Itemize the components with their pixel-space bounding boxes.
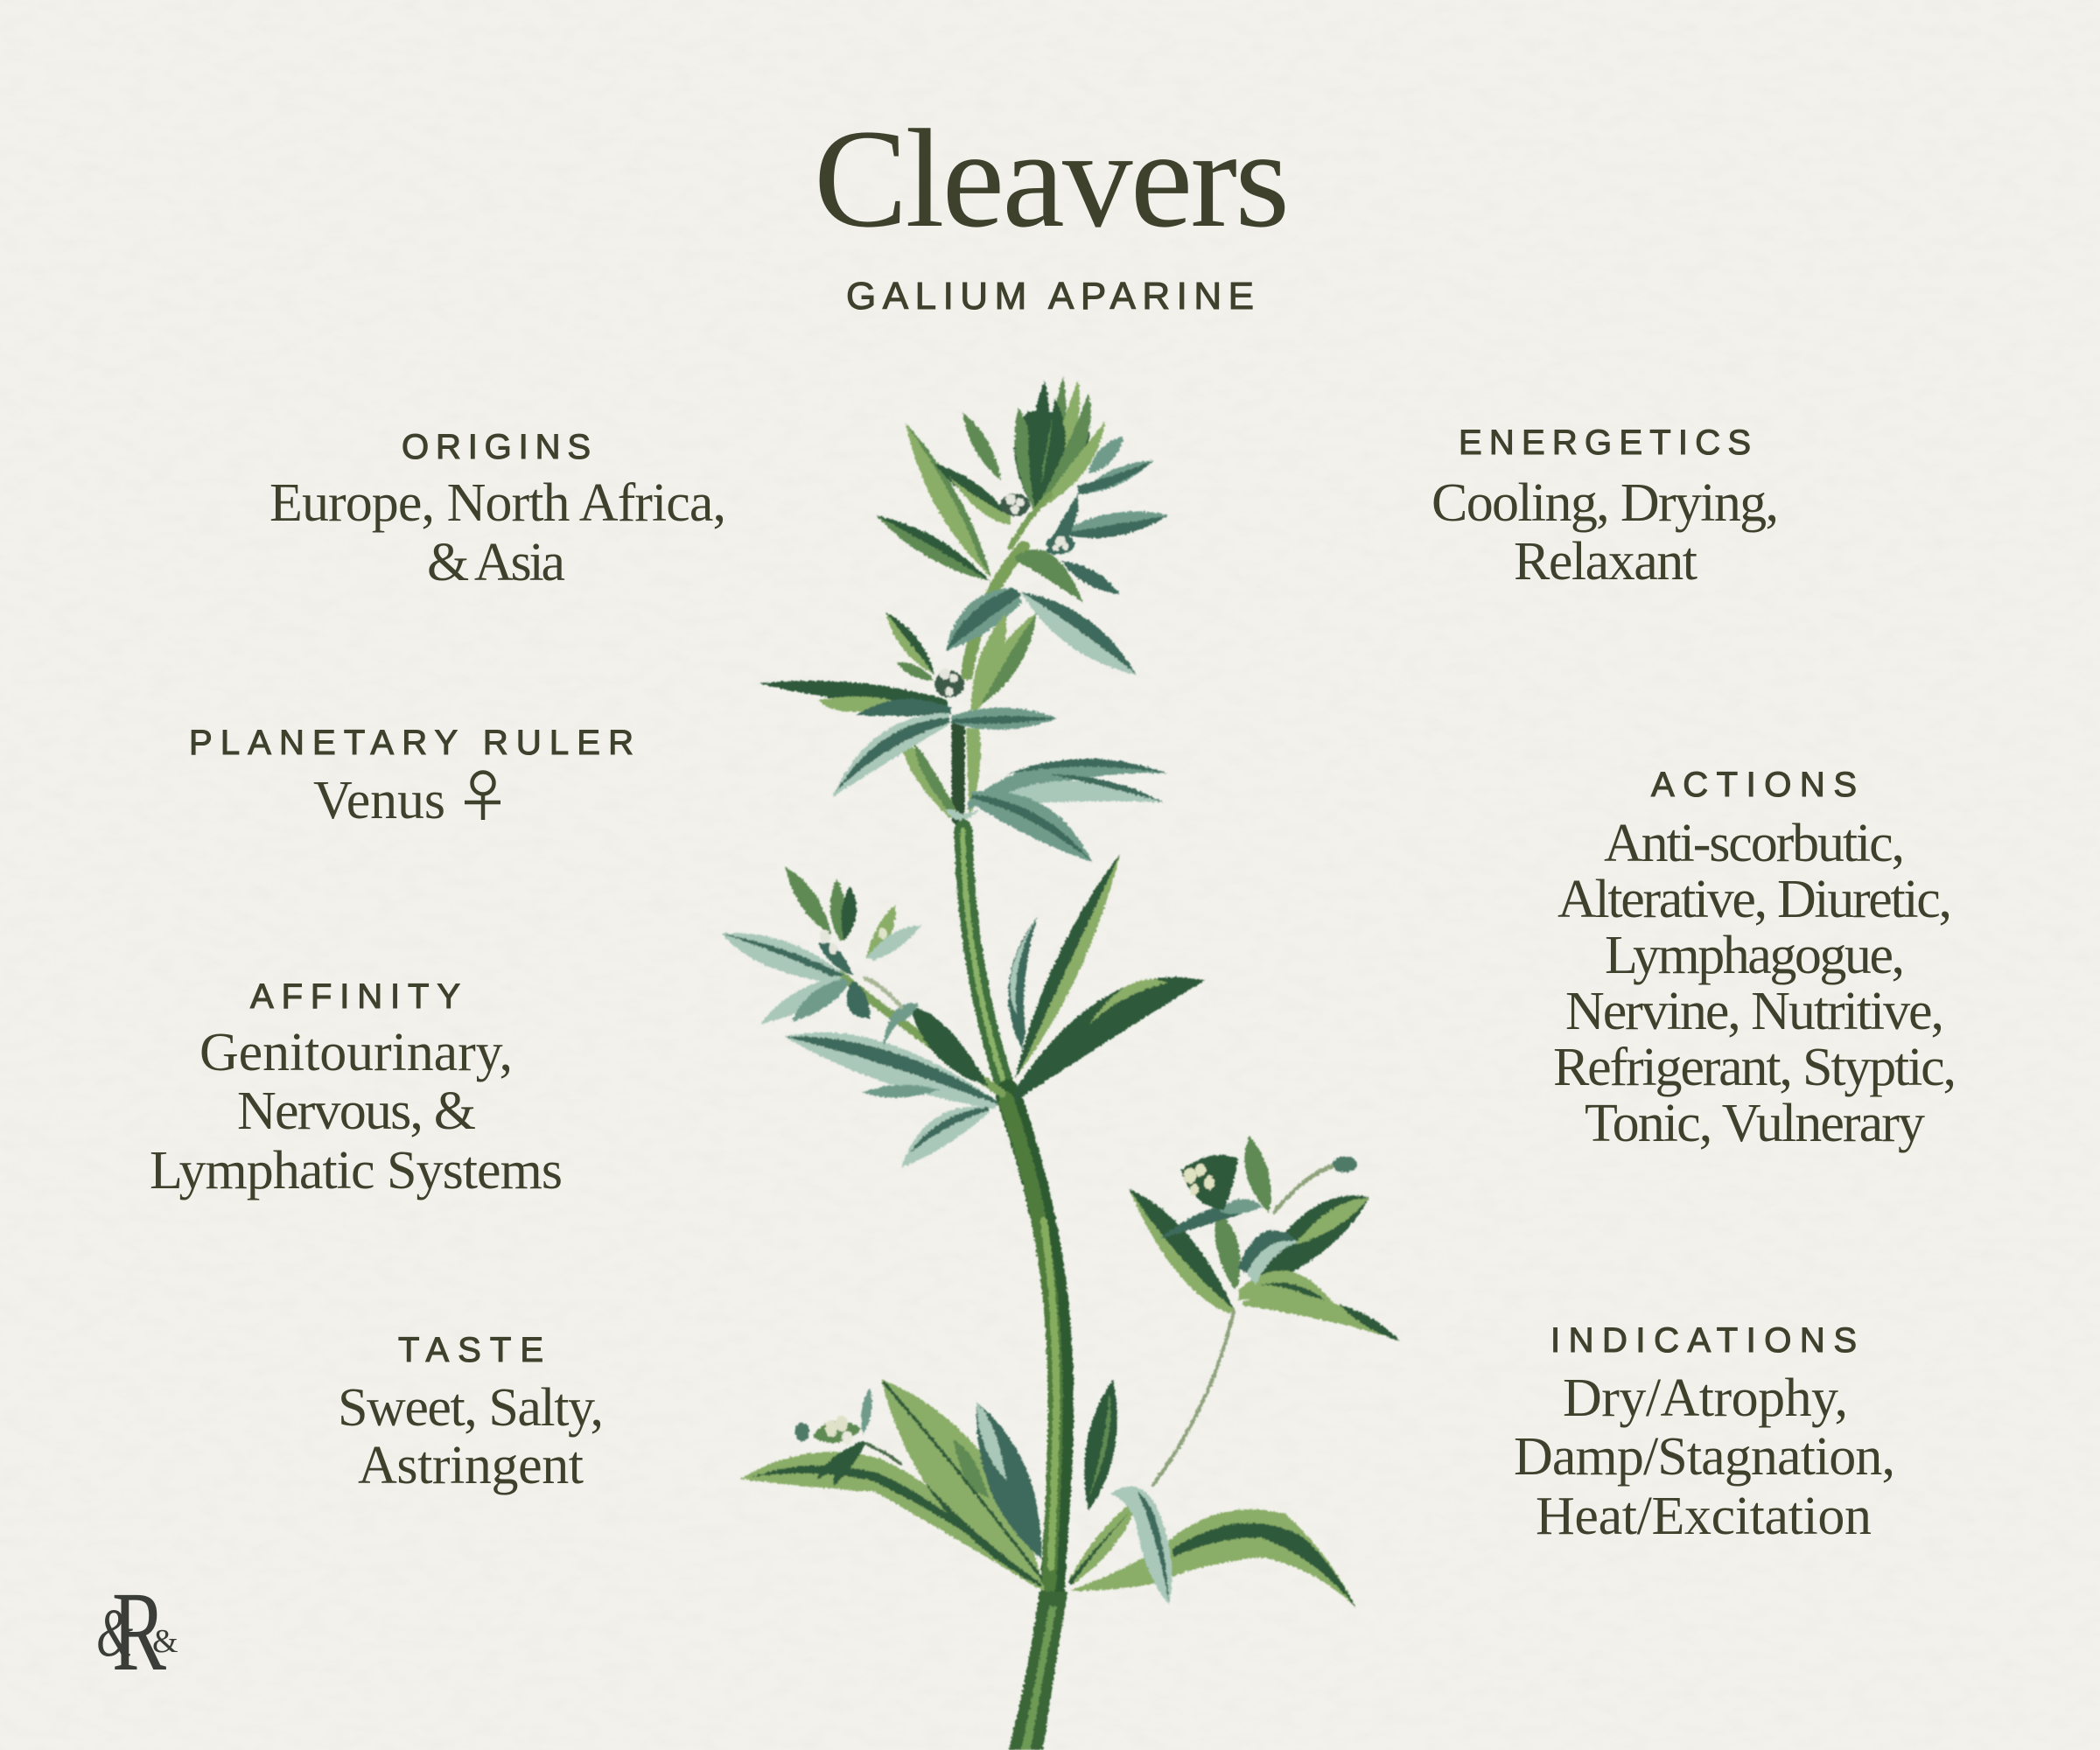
block: affinity: Nervous, & <box>237 1082 476 1141</box>
small flowers <box>934 494 1074 697</box>
block: affinity: Genitourinary, <box>200 1023 513 1082</box>
block: origins: ORIGINS <box>402 428 591 466</box>
block: energetics: Relaxant <box>1514 532 1698 592</box>
block: actions: Lymphagogue, <box>1605 926 1905 985</box>
block: actions: Nervine, Nutritive, <box>1565 982 1944 1041</box>
block: energetics <box>1432 424 1779 592</box>
icon: venus symbol <box>465 772 500 820</box>
block: planetary ruler: PLANETARY RULER <box>189 724 634 762</box>
block: taste: Sweet, Salty, <box>338 1378 604 1438</box>
block: indications: INDICATIONS <box>1550 1321 1857 1360</box>
small flower cluster lower <box>795 1389 901 1486</box>
logo monogram: & <box>96 1594 133 1670</box>
logo monogram: & <box>152 1623 178 1660</box>
leaf cluster: top <box>876 375 1169 697</box>
block: planetary ruler <box>189 724 634 830</box>
block: affinity: AFFINITY <box>250 977 460 1016</box>
block: actions <box>1553 766 1956 1153</box>
block: affinity <box>150 977 563 1200</box>
block: affinity: Lymphatic Systems <box>150 1141 563 1200</box>
flower head <box>1014 375 1105 512</box>
block: indications: Dry/Atrophy, <box>1563 1368 1848 1428</box>
block: indications: Damp/Stagnation, <box>1514 1427 1895 1487</box>
block: taste: TASTE <box>398 1331 543 1369</box>
logo monogram: R <box>112 1569 166 1695</box>
block: taste <box>338 1331 604 1495</box>
upper stem <box>958 547 1024 818</box>
block: actions: Anti-scorbutic, <box>1604 814 1905 873</box>
title: Cleavers <box>814 101 1290 256</box>
leaf cluster: second whorl <box>759 612 1167 862</box>
block: actions: Refrigerant, Styptic, <box>1553 1038 1956 1097</box>
bud <box>1333 1156 1357 1172</box>
illustration: cleavers plant <box>722 375 1400 1750</box>
flower <box>1181 1155 1238 1210</box>
leaf cluster: lower whorl <box>740 1379 1356 1607</box>
block: origins <box>270 428 726 592</box>
block: actions: Tonic, Vulnerary <box>1585 1094 1925 1153</box>
block: actions: Alterative, Diuretic, <box>1558 870 1952 929</box>
block: origins: & Asia <box>427 533 565 592</box>
leaf cluster: right branch <box>1129 1136 1400 1485</box>
subtitle: GALIUM APARINE <box>846 275 1254 318</box>
main stem <box>962 831 1068 1750</box>
block: origins: Europe, North Africa, <box>270 473 726 533</box>
block: actions: ACTIONS <box>1651 766 1857 804</box>
block: taste: Astringent <box>358 1436 584 1495</box>
block: indications: Heat/Excitation <box>1536 1487 1872 1546</box>
block: energetics: ENERGETICS <box>1459 424 1751 462</box>
block: planetary ruler: Venus <box>313 771 445 830</box>
block: energetics: Cooling, Drying, <box>1432 473 1779 533</box>
block: indications <box>1514 1321 1895 1546</box>
small flower cluster left <box>722 867 921 1024</box>
lower plant (stem and lower branches) <box>722 831 1400 1750</box>
leaf cluster: middle whorl <box>722 854 1205 1168</box>
